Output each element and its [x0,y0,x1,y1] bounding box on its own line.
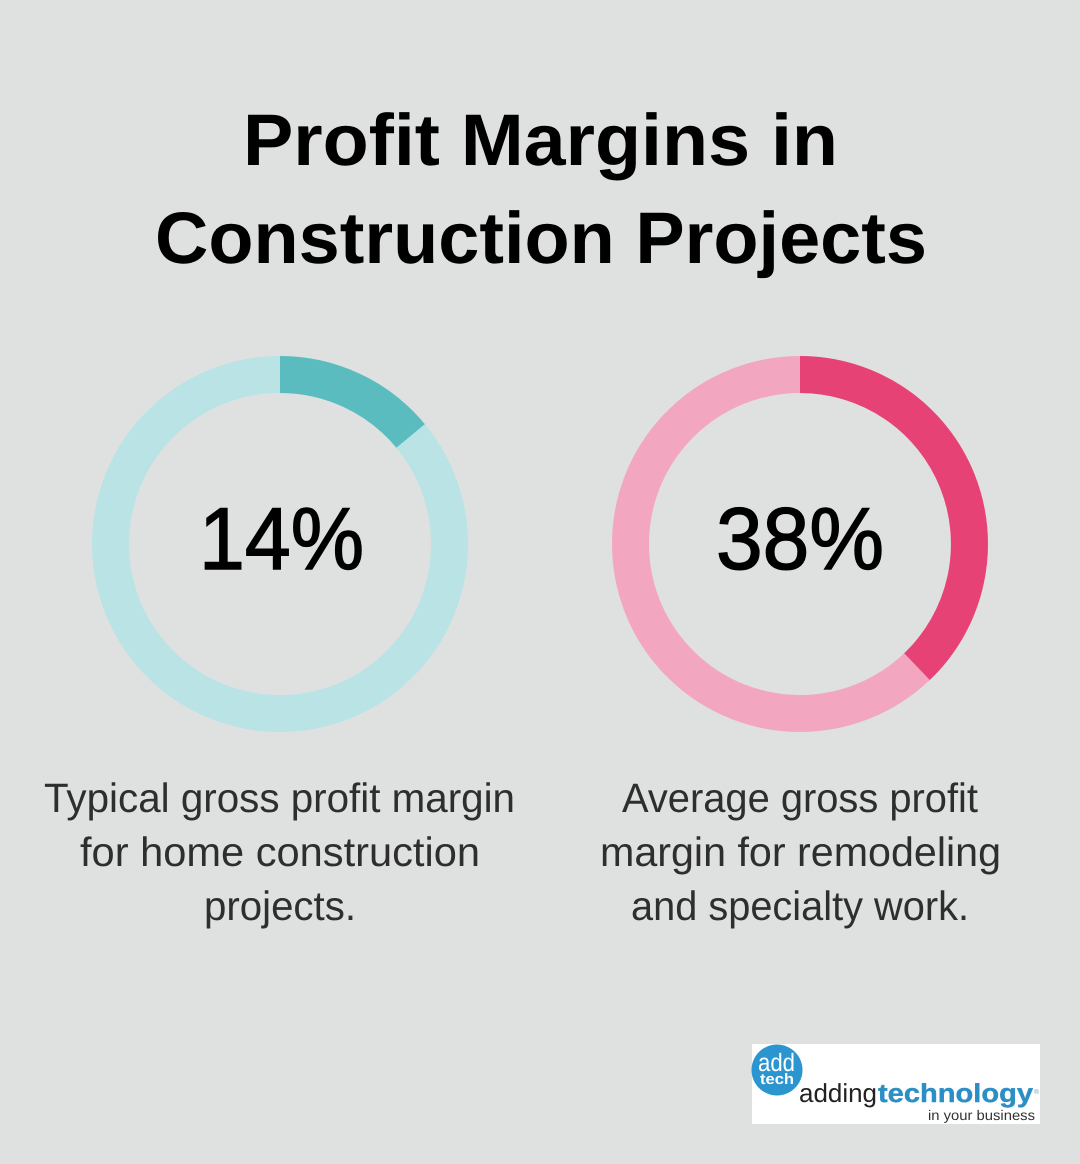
description: remodeling: margin for remodeling [600,829,1001,875]
donut chart: 14 percent [110,374,450,714]
value: 38%: 38% [716,489,884,588]
title: Construction Projects [155,198,927,279]
title: Profit Margins in [243,100,838,181]
description: remodeling: and specialty work. [631,883,969,929]
description: home construction: for home construction [80,829,480,875]
panel: remodeling margin [600,374,1001,929]
wordmark: technology [878,1078,1034,1108]
wordmark: ® [1034,1089,1040,1096]
donut chart: 38 percent [630,374,970,714]
description: home construction: projects. [204,883,356,929]
icon: add tech badge [752,1044,802,1096]
tagline: in your business [928,1107,1035,1123]
icon: add tech badge: tech [760,1071,794,1088]
wordmark: adding [799,1078,877,1108]
description: remodeling [600,775,1001,929]
logo: adding technology [752,1044,1040,1124]
panel: home construction margin [44,374,515,929]
value: 14%: 14% [199,489,364,588]
title [155,100,927,279]
description: home construction: Typical gross profit margin [44,775,515,821]
icon: add tech badge: add [758,1049,795,1077]
description: home construction [44,775,515,929]
wordmark [799,1078,1040,1108]
description: remodeling: Average gross profit [622,775,979,821]
